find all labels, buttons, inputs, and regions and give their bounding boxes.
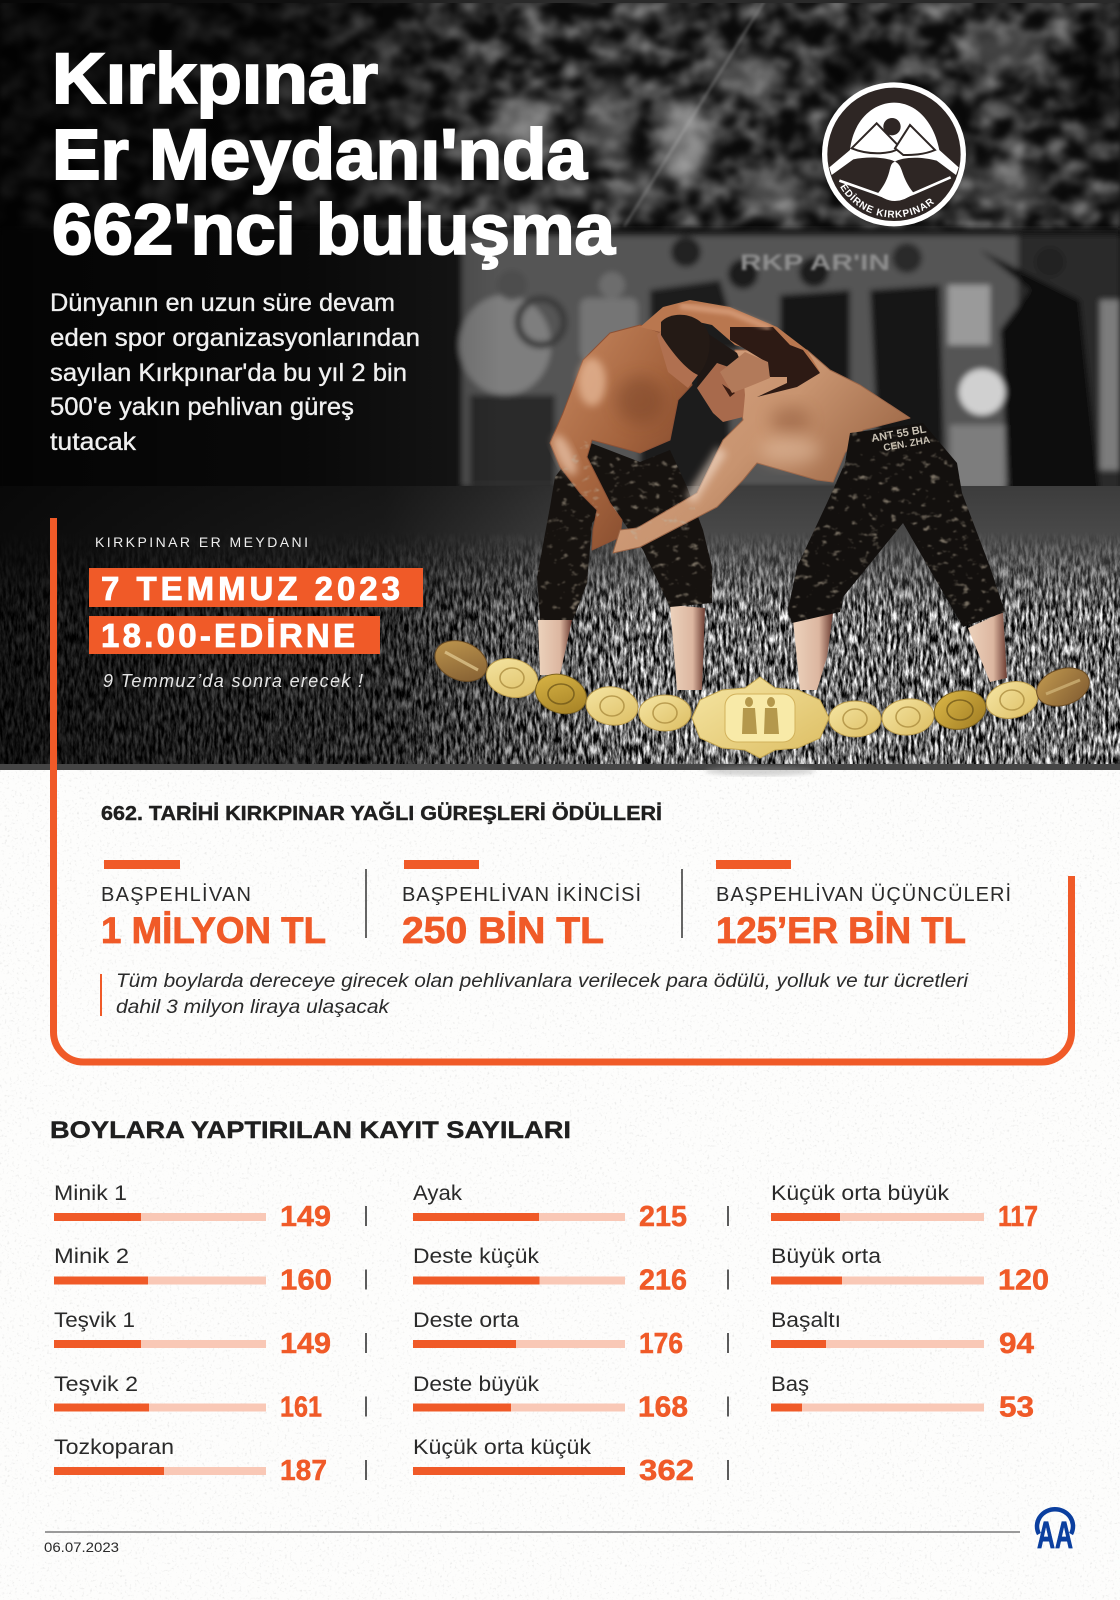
wrestler right: CEN. ZHA (883, 435, 931, 454)
intro text: tutacak (50, 428, 137, 456)
row: Deste büyük: 168 (638, 1392, 688, 1424)
row: Deste küçük: Deste küçük (413, 1245, 540, 1268)
title: Er Meydanı'nda (52, 116, 588, 195)
prize: başpehlivan üçüncüleri (716, 860, 1011, 951)
registrations column 1 (54, 1182, 332, 1487)
row: Minik 1: 149 (280, 1201, 331, 1233)
venue label: KIRKPINAR ER MEYDANI (95, 534, 308, 550)
prize: başpehlivan ikincisi: 250 BİN TL (402, 910, 604, 951)
prize: başpehlivan: 1 MİLYON TL (101, 910, 326, 951)
row: Başaltı (771, 1309, 1034, 1360)
banner and officers (0, 228, 1120, 494)
row: Minik 2: 160 (280, 1264, 332, 1296)
time and place box: 18.00-EDİRNE (101, 617, 355, 654)
row: Baş (771, 1373, 1034, 1424)
icon: Anadolu Agency logo: AA (1037, 1515, 1073, 1557)
row: Küçük orta büyük: Küçük orta büyük (771, 1182, 950, 1205)
grass field (0, 486, 1120, 765)
row: Minik 1: Minik 1 (54, 1182, 127, 1205)
intro text: 500'e yakın pehlivan güreş (50, 393, 354, 421)
row: Baş: Baş (771, 1373, 809, 1396)
row: Büyük orta: 120 (998, 1264, 1049, 1296)
crowd (0, 0, 1120, 240)
wrestler right (530, 300, 1010, 690)
date box: 7 TEMMUZ 2023 (101, 570, 400, 607)
icon: Edirne Kırkpınar logo (822, 82, 966, 226)
prize: başpehlivan ikincisi: BAŞPEHLİVAN İKİNCİSİ (402, 883, 641, 906)
banner lettering: RKP AR'IN (740, 250, 890, 275)
intro text: Dünyanın en uzun süre devam (50, 289, 395, 317)
prize: başpehlivan ikincisi (402, 860, 641, 951)
registrations column 3 (771, 1182, 1049, 1424)
row: Ayak (413, 1182, 687, 1233)
orange frame line (54, 518, 1072, 1062)
prize: başpehlivan: BAŞPEHLİVAN (101, 883, 251, 906)
row: Deste orta: Deste orta (413, 1309, 519, 1332)
date: 06.07.2023 (44, 1539, 119, 1555)
row: Baş: 53 (999, 1392, 1034, 1424)
row: Tozkoparan: Tozkoparan (54, 1436, 174, 1459)
wrestler right: ANT 55 BL (870, 423, 928, 445)
row: Teşvik 2: Teşvik 2 (54, 1373, 138, 1396)
row: Deste orta: 176 (639, 1328, 683, 1360)
row: Büyük orta: Büyük orta (771, 1245, 881, 1268)
row: Küçük orta küçük (413, 1436, 694, 1487)
champion belt with gold medallions (429, 633, 1094, 758)
row: Küçük orta küçük: 362 (639, 1455, 694, 1487)
title: Kırkpınar (52, 40, 378, 119)
row: Minik 2: Minik 2 (54, 1245, 129, 1268)
prizes heading: 662. TARİHİ KIRKPINAR YAĞLI GÜREŞLERİ ÖDÜLLERİ (101, 801, 662, 825)
hero photo: wrestlers on grass in front of crowd (0, 0, 1120, 765)
row: Tozkoparan (54, 1436, 327, 1487)
row: Deste küçük (413, 1245, 687, 1296)
title (52, 40, 616, 270)
prize: başpehlivan üçüncüleri: BAŞPEHLİVAN ÜÇÜNCÜLERİ (716, 883, 1011, 906)
prize: başpehlivan üçüncüleri: 125’ER BİN TL (716, 910, 966, 951)
head of left wrestler (658, 314, 702, 388)
icon: Edirne Kırkpınar logo: EDİRNE KIRKPINAR (840, 184, 934, 218)
row: Deste küçük: 216 (639, 1264, 687, 1296)
row: Küçük orta büyük: 117 (998, 1201, 1038, 1233)
row: Minik 2 (54, 1245, 332, 1296)
row: Başaltı: 94 (999, 1328, 1034, 1360)
end date note: 9 Temmuz’da sonra erecek ! (103, 671, 363, 691)
registrations heading: BOYLARA YAPTIRILAN KAYIT SAYILARI (50, 1117, 571, 1144)
row: Tozkoparan: 187 (280, 1455, 327, 1487)
icon: Anadolu Agency logo (1037, 1509, 1073, 1557)
row: Büyük orta (771, 1245, 1049, 1296)
row: Deste büyük: Deste büyük (413, 1373, 540, 1396)
prize note: Tüm boylarda dereceye girecek olan pehlivanlara verilecek para ödülü, yolluk ve tur ücretleri (116, 971, 969, 992)
intro text: eden spor organizasyonlarından (50, 324, 420, 352)
prize note (100, 971, 969, 1018)
row: Küçük orta küçük: Küçük orta küçük (413, 1436, 592, 1459)
row: Deste orta (413, 1309, 683, 1360)
title: 662'nci buluşma (52, 191, 616, 270)
wrestler left (537, 325, 712, 690)
row: Minik 1 (54, 1182, 331, 1233)
registrations column 2 (413, 1182, 694, 1487)
belt shadow (705, 766, 815, 776)
row: Başaltı: Başaltı (771, 1309, 841, 1332)
prize: başpehlivan (101, 860, 326, 951)
prize note: dahil 3 milyon liraya ulaşacak (116, 997, 391, 1018)
row: Teşvik 1: 149 (280, 1328, 331, 1360)
row: Küçük orta büyük (771, 1182, 1038, 1233)
row: Teşvik 1 (54, 1309, 331, 1360)
row: Deste büyük (413, 1373, 688, 1424)
photo bottom band (0, 764, 1120, 770)
row: Teşvik 2 (54, 1373, 322, 1424)
row: Ayak: Ayak (413, 1182, 463, 1205)
intro text: sayılan Kırkpınar'da bu yıl 2 bin (50, 359, 407, 387)
row: Teşvik 2: 161 (280, 1392, 322, 1424)
row: Teşvik 1: Teşvik 1 (54, 1309, 135, 1332)
intro text (50, 289, 420, 456)
row: Ayak: 215 (639, 1201, 687, 1233)
